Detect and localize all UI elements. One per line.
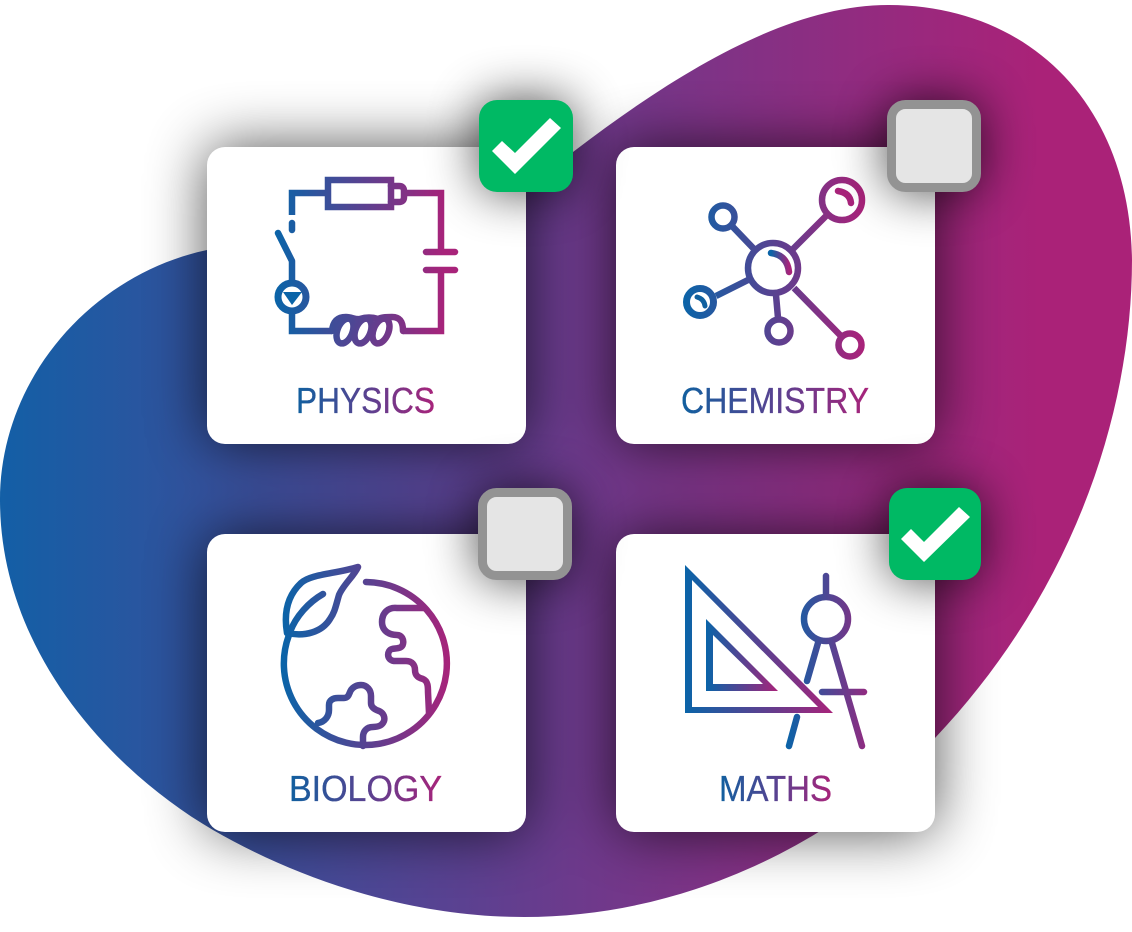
label: chemistry: CHEMISTRY [681,380,869,421]
checkbox: chemistry unchecked [892,104,976,188]
panel: physics [207,147,526,444]
label: maths: MATHS [719,768,832,809]
checkbox: physics checked [479,100,573,192]
biology card background [207,534,526,832]
checkbox: maths checked [889,488,981,580]
panel: chemistry [616,147,935,444]
icon: electric circuit [278,180,455,346]
icon: set square and compass [685,565,864,746]
label: physics: PHYSICS [296,380,435,421]
checkbox shadows [478,100,981,580]
chemistry card background [616,147,935,444]
panel: maths [616,534,935,832]
icon: globe with leaf [284,567,447,746]
card drop shadows [207,147,935,832]
panel: biology [207,534,526,832]
icon: molecule [686,180,862,356]
label: biology: BIOLOGY [289,768,442,809]
physics card background [207,147,526,444]
maths card background [616,534,935,832]
checkbox: biology unchecked [482,492,568,576]
